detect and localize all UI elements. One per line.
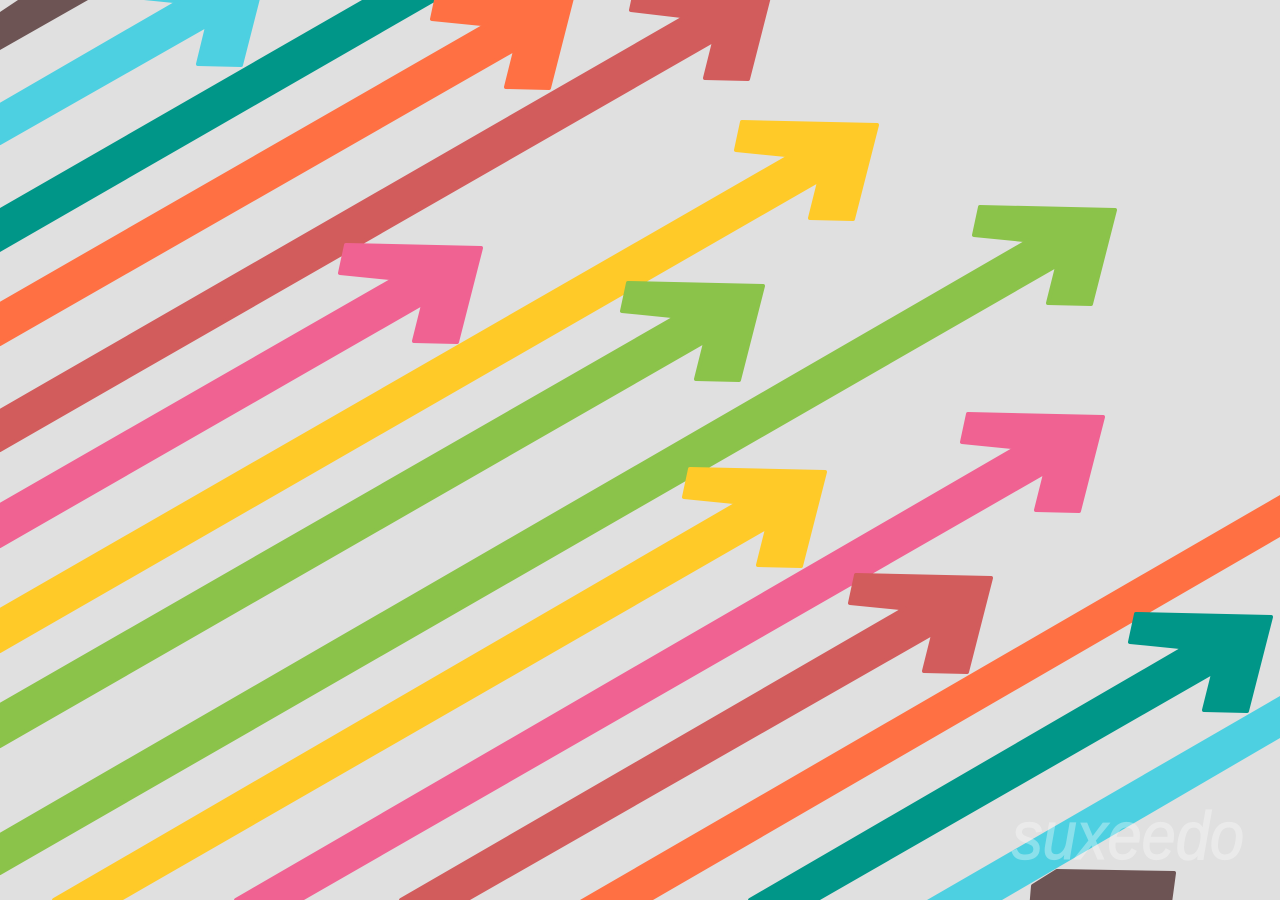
arrow: cyan top (0, 0, 265, 143)
arrow: green long (0, 207, 1115, 873)
arrow: red top (0, 0, 772, 450)
arrow shaft: teal top (0, 0, 438, 252)
arrow: pink lower (236, 414, 1103, 900)
arrow: yellow lower (54, 469, 825, 900)
arrow: yellow upper (0, 122, 877, 651)
arrow head: brown bottom-right (1031, 871, 1174, 900)
arrow: teal lower-right (750, 614, 1271, 900)
arrow: pink upper-left (0, 245, 481, 546)
arrow: green middle (0, 283, 763, 746)
arrow shaft: orange lower-right (580, 495, 1280, 900)
arrow: orange top (0, 0, 573, 344)
watermark: suxeedo: suxeedo (1012, 798, 1244, 874)
arrow: red lower (401, 575, 991, 900)
arrow shaft: cyan bottom-right (927, 696, 1280, 900)
arrow shaft: brown top-left (0, 0, 88, 50)
